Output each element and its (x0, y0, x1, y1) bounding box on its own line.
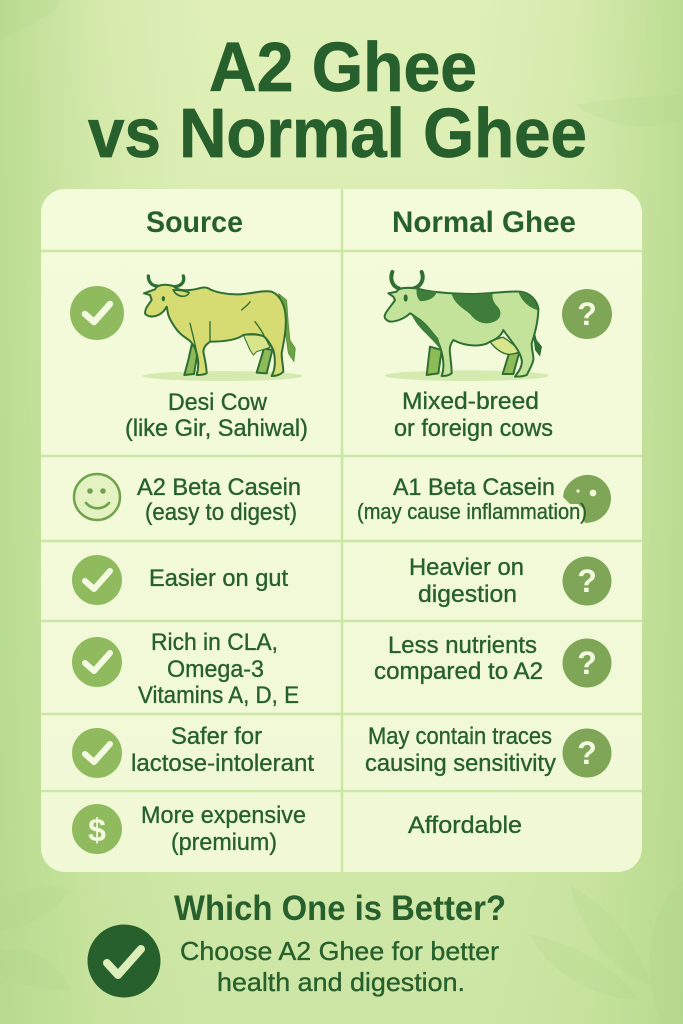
icon: question source (562, 289, 612, 339)
text: heavier (409, 554, 524, 608)
icon: dollar: $ (88, 812, 106, 848)
icon: desi cow (143, 276, 303, 381)
text: a2 casein: (easy to digest) (145, 499, 297, 526)
icon: question gut (562, 556, 612, 606)
icon: question traces: ? (577, 735, 597, 771)
text: price: More expensive (141, 802, 306, 829)
icon: bitten sad face (563, 475, 611, 523)
text: mixed breed: or foreign cows (394, 415, 553, 442)
conclusion text: health and digestion. (217, 967, 465, 997)
text: heavier: Heavier on (409, 554, 524, 581)
text: a2 casein (137, 474, 301, 526)
text: nutrients (138, 629, 299, 709)
text: less nutrients: compared to A2 (374, 658, 543, 685)
text: a1 casein: (may cause inflammation) (357, 499, 587, 524)
text: mixed breed (394, 388, 553, 442)
title (88, 28, 587, 172)
icon: mixed breed cow (385, 272, 549, 381)
icon: check lactose (72, 728, 122, 778)
text: nutrients: Rich in CLA, (151, 629, 278, 656)
text: less nutrients (374, 632, 543, 685)
title: A2 Ghee (209, 28, 477, 106)
title: vs Normal Ghee (88, 94, 587, 172)
icon: check source (70, 286, 124, 340)
text: a2 casein: A2 Beta Casein (137, 474, 301, 501)
text: nutrients: Vitamins A, D, E (138, 682, 299, 709)
text: traces: causing sensitivity (365, 750, 556, 777)
conclusion text: Choose A2 Ghee for better (180, 936, 499, 966)
icon: check gut (72, 555, 122, 605)
text: less nutrients: Less nutrients (388, 632, 537, 659)
icon: question gut: ? (577, 563, 597, 599)
icon: large check (88, 924, 160, 998)
text: price: (premium) (171, 829, 277, 856)
header: normal ghee: Normal Ghee (392, 206, 576, 239)
text: a1 casein (357, 474, 587, 524)
text: a1 casein: A1 Beta Casein (393, 474, 555, 501)
text: price (141, 802, 306, 856)
heading: which one is better: Which One is Better? (174, 889, 506, 928)
icon: question nutrients: ? (577, 645, 597, 681)
icon: smile (74, 474, 120, 520)
text: lactose: Safer for (171, 723, 262, 750)
text: lactose (131, 723, 314, 777)
conclusion text (180, 936, 499, 997)
text: nutrients: Omega-3 (167, 656, 264, 683)
text: traces (365, 723, 556, 777)
text: heavier: digestion (418, 581, 517, 608)
icon: question source: ? (577, 296, 597, 332)
header: source: Source (146, 206, 243, 239)
text: affordable: Affordable (408, 812, 522, 839)
text: desi cow (125, 389, 308, 442)
text: traces: May contain traces (368, 723, 552, 750)
text: mixed breed: Mixed-breed (402, 388, 539, 415)
text: easier on gut: Easier on gut (149, 565, 288, 592)
text: desi cow: (like Gir, Sahiwal) (125, 415, 308, 442)
icon: question traces (562, 728, 612, 778)
text: desi cow: Desi Cow (168, 389, 268, 416)
text: lactose: lactose-intolerant (131, 750, 314, 777)
icon: dollar (72, 804, 122, 854)
icon: check nutrients (72, 637, 122, 687)
icon: question nutrients (562, 638, 612, 688)
comparison table (41, 189, 642, 872)
